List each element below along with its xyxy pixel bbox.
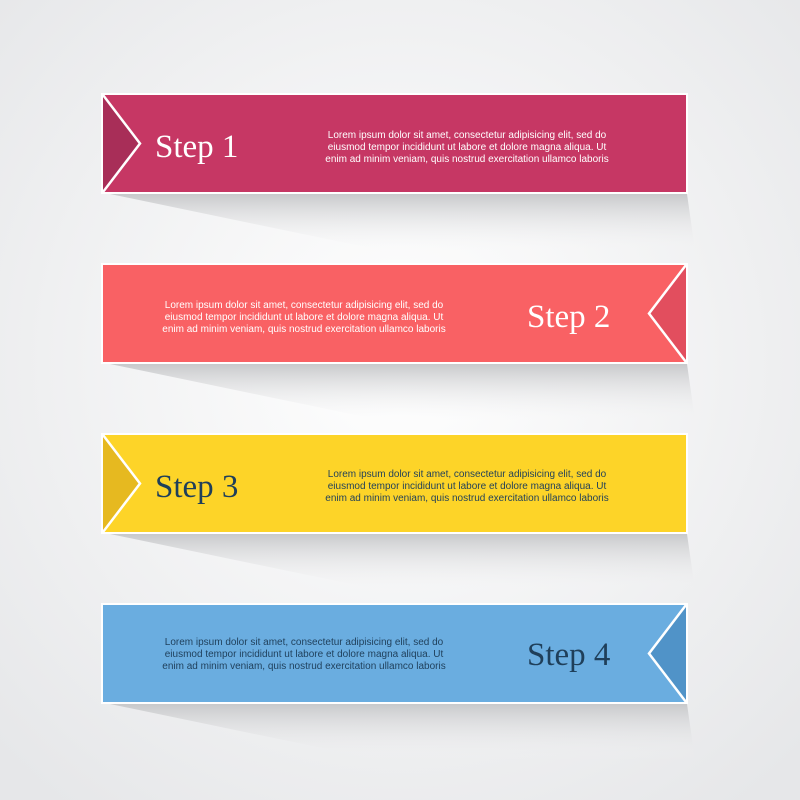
shadows — [110, 194, 695, 760]
banner: step 2: Step 2 — [527, 299, 610, 335]
banner: step 3: Lorem ipsum dolor sit amet, consectetur adipisicing elit, sed do — [328, 469, 607, 480]
banner: step 4: Lorem ipsum dolor sit amet, consectetur adipisicing elit, sed do — [165, 637, 444, 648]
banner: step 3 — [102, 434, 687, 533]
banner: step 1: enim ad minim veniam, quis nostrud exercitation ullamco laboris — [325, 154, 609, 165]
banner: step 2: Lorem ipsum dolor sit amet, consectetur adipisicing elit, sed do — [165, 300, 444, 311]
banner: step 3: eiusmod tempor incididunt ut labore et dolore magna aliqua. Ut — [328, 481, 606, 492]
banner: step 1: Step 1 — [155, 129, 238, 165]
banner: step 4: Step 4 — [527, 637, 610, 673]
banner: step 1: eiusmod tempor incididunt ut labore et dolore magna aliqua. Ut — [328, 142, 606, 153]
banner: step 4: eiusmod tempor incididunt ut labore et dolore magna aliqua. Ut — [165, 649, 443, 660]
banner: step 4: enim ad minim veniam, quis nostrud exercitation ullamco laboris — [162, 661, 446, 672]
banner: step 2 — [102, 264, 687, 363]
banner: step 4 — [102, 604, 687, 703]
banner: step 1: Lorem ipsum dolor sit amet, consectetur adipisicing elit, sed do — [328, 130, 607, 141]
banner: step 1 — [102, 94, 687, 193]
banner: step 2: eiusmod tempor incididunt ut labore et dolore magna aliqua. Ut — [165, 312, 443, 323]
banner: step 3: Step 3 — [155, 469, 238, 505]
banner: step 3: enim ad minim veniam, quis nostrud exercitation ullamco laboris — [325, 493, 609, 504]
banner: step 2: enim ad minim veniam, quis nostrud exercitation ullamco laboris — [162, 324, 446, 335]
